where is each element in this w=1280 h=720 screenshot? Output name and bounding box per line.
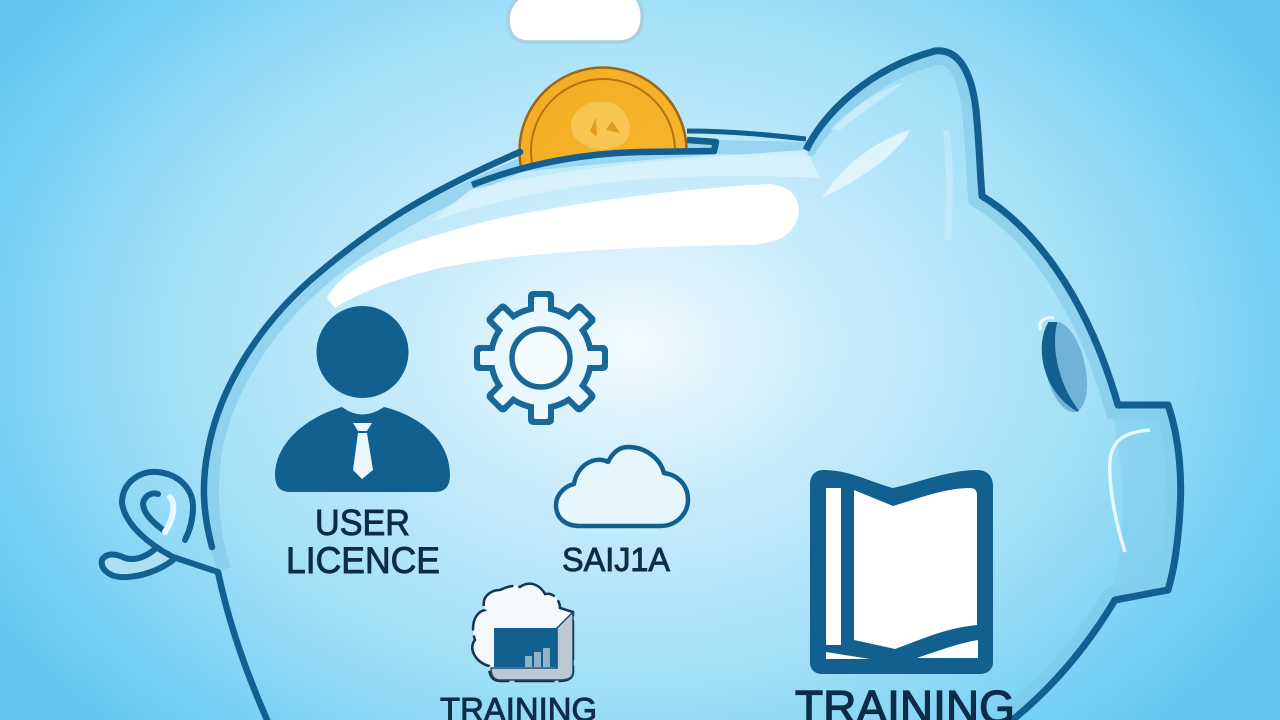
glass rim (207, 54, 1177, 640)
icon: tie (353, 423, 373, 479)
tail lower ribbon (102, 550, 173, 577)
icon: mini bars (525, 648, 550, 667)
label: user licence: LICENCE (286, 540, 440, 581)
icon: screen (494, 628, 557, 667)
icon: gray side (491, 612, 573, 680)
icon: gear (474, 291, 608, 425)
label: user licence (286, 502, 440, 581)
icon: training dashboard (472, 584, 573, 681)
tail (102, 472, 218, 577)
label: user licence: USER (315, 502, 410, 543)
coin symbol (571, 101, 630, 150)
label: cloud: SAIJ1A (562, 541, 670, 578)
icon: user licence (275, 306, 450, 581)
icon: head (316, 306, 408, 398)
under slot band (430, 150, 820, 222)
coin (518, 66, 688, 166)
book lower left page (826, 652, 870, 659)
snout highlight (1110, 430, 1150, 552)
top cloud (508, 0, 642, 42)
ear highlights (822, 130, 910, 198)
coin slot (472, 140, 716, 185)
icon: book (810, 470, 993, 674)
book main page (854, 488, 977, 649)
book lower right page (917, 640, 978, 658)
book spine page (826, 488, 841, 645)
tail highlight (165, 497, 173, 532)
icon: shoulders (275, 407, 450, 492)
eye (1035, 318, 1095, 416)
main highlight (327, 184, 799, 308)
snout shade (1113, 419, 1153, 492)
icon: training cloud (472, 584, 573, 681)
body outline (204, 152, 520, 547)
piggy bank (102, 51, 1181, 720)
icon: cloud (556, 447, 688, 526)
